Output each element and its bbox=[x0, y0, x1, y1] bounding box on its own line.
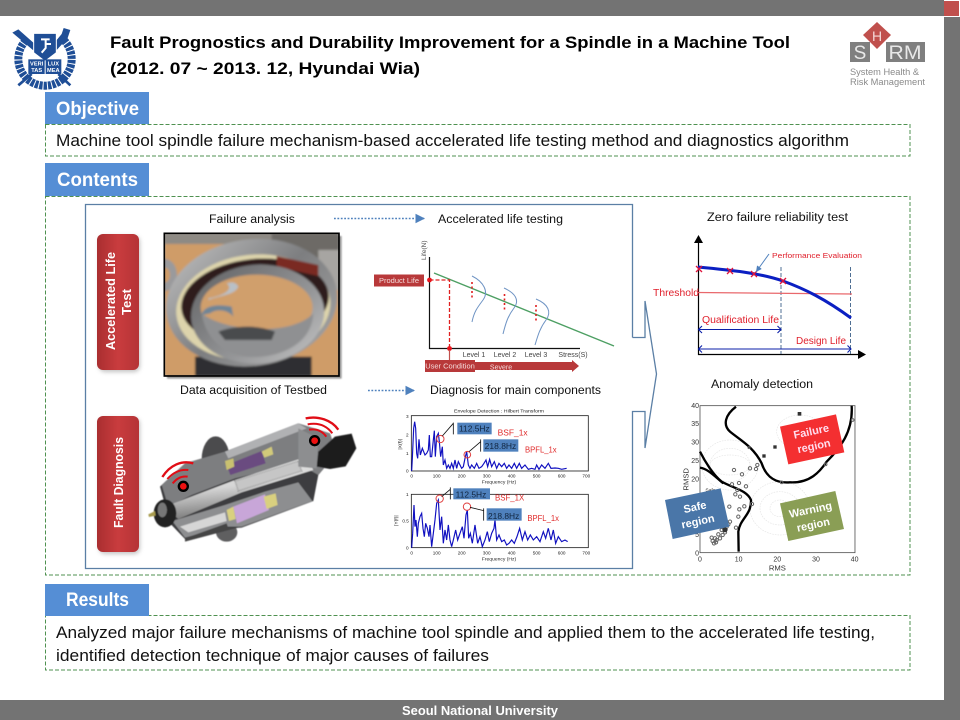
chart: accelerated life stress-life plot: Level 3 bbox=[525, 352, 547, 359]
icon: university emblem: TAS bbox=[31, 68, 42, 74]
chart: anomaly detection scatter map: RMS bbox=[769, 564, 786, 573]
illustration: spindle cutaway with sensors bbox=[148, 418, 356, 542]
chart: accelerated life stress-life plot: Level 2 bbox=[494, 352, 516, 359]
spectrum plot: upper: 500 bbox=[533, 473, 541, 478]
chart: anomaly detection scatter map: Region bbox=[783, 436, 799, 442]
chart: envelope spectra with fault frequencies: Envelope Detection : Hilbert Transform bbox=[454, 408, 544, 413]
footer bar bbox=[0, 700, 960, 720]
chart: zero failure reliability curve bbox=[653, 235, 866, 359]
label pill: accelerated life test bbox=[97, 234, 140, 372]
spectrum plot: lower: 1 bbox=[406, 492, 409, 497]
panel: results: identified detection technique of major causes of failures bbox=[56, 646, 489, 665]
heading: accelerated life testing: Accelerated life testing bbox=[438, 214, 563, 226]
chart: anomaly detection scatter map: 10 bbox=[691, 514, 699, 521]
chart: anomaly detection scatter map: Safe bbox=[705, 488, 716, 494]
spectrum plot: lower bbox=[393, 487, 591, 563]
heading: failure analysis: Failure analysis bbox=[209, 214, 295, 226]
spectrum plot: upper: BSF_1x bbox=[498, 428, 528, 437]
panel: objective bbox=[45, 92, 910, 156]
spectrum plot: upper: 0 bbox=[406, 469, 409, 474]
chart: envelope spectra with fault frequencies bbox=[393, 408, 591, 563]
chart: anomaly detection scatter map: RMSD bbox=[682, 468, 691, 491]
spectrum plot: lower: 300 bbox=[483, 550, 491, 555]
spectrum plot: upper: 218.8Hz bbox=[485, 442, 516, 451]
arrow: testbed to diagnosis bbox=[368, 390, 415, 392]
chart: anomaly detection scatter map: Failure bbox=[783, 427, 798, 433]
spectrum plot: upper: 0 bbox=[410, 473, 413, 478]
spectrum plot: lower: 112.5Hz bbox=[456, 491, 486, 500]
chart: anomaly detection scatter map: 5 bbox=[695, 532, 699, 539]
region label: warning: Warning bbox=[788, 500, 833, 521]
spectrum plot: upper: 200 bbox=[458, 473, 466, 478]
icon: SHRM logo: S bbox=[854, 43, 866, 64]
chart: anomaly detection scatter map: 20 bbox=[691, 477, 699, 484]
arrow: failure analysis to accelerated life testing bbox=[334, 218, 425, 220]
heading: zero failure reliability test: Zero failure reliability test bbox=[707, 212, 849, 224]
icon: SHRM logo: System Health & bbox=[850, 67, 920, 78]
chart: accelerated life stress-life plot bbox=[374, 240, 614, 372]
spectrum plot: lower: 200 bbox=[458, 550, 466, 555]
spectrum plot: upper: 300 bbox=[483, 473, 491, 478]
icon: SHRM logo bbox=[850, 22, 925, 88]
chart: accelerated life stress-life plot: Product Life bbox=[379, 276, 419, 285]
label pill: fault diagnosis: Fault Diagnosis bbox=[111, 437, 126, 528]
icon: university emblem bbox=[12, 28, 72, 86]
spectrum plot: upper: 700 bbox=[582, 473, 591, 478]
chart: anomaly detection scatter map: 35 bbox=[691, 421, 699, 428]
panel: results: Results bbox=[66, 590, 129, 611]
heading: diagnosis for main components: Diagnosis for main components bbox=[430, 385, 601, 397]
spectrum plot: upper: 3 bbox=[406, 414, 409, 419]
chart: anomaly detection scatter map bbox=[665, 403, 859, 573]
spectrum plot: upper: 112.5Hz bbox=[459, 425, 490, 434]
spectrum plot: lower: BSF_1X bbox=[495, 494, 525, 503]
spectrum plot: lower: 0 bbox=[410, 550, 413, 555]
spectrum plot: lower: 0.5 bbox=[402, 519, 409, 524]
icon: university emblem: MEA bbox=[47, 68, 60, 74]
chart: anomaly detection scatter map: 0 bbox=[695, 550, 699, 557]
spectrum plot: upper: Frequency (Hz) bbox=[482, 480, 516, 486]
spectrum plot: lower: |Y(f)| bbox=[393, 515, 399, 526]
spectrum plot: upper: BPFL_1x bbox=[525, 446, 557, 455]
region label: safe: region bbox=[680, 513, 716, 531]
spectrum plot: upper bbox=[397, 414, 591, 486]
spectrum plot: upper: 2 bbox=[406, 433, 409, 438]
chart: anomaly detection scatter map: 30 bbox=[691, 440, 699, 447]
region label: safe: Safe bbox=[682, 499, 708, 516]
spectrum plot: lower: Frequency (Hz) bbox=[482, 557, 516, 563]
chart: zero failure reliability curve: Performance Evaluation bbox=[772, 251, 862, 260]
icon: SHRM logo: H bbox=[872, 28, 882, 44]
region label: failure: region bbox=[796, 437, 832, 456]
label pill: accelerated life test: Test bbox=[119, 288, 134, 315]
chart: zero failure reliability curve: Design Life bbox=[796, 336, 846, 347]
chart: anomaly detection scatter map: 40 bbox=[691, 403, 699, 410]
region label: warning: region bbox=[796, 516, 831, 535]
spectrum plot: upper: 600 bbox=[558, 473, 566, 478]
region label: failure bbox=[780, 414, 844, 464]
spectrum plot: lower: 0 bbox=[406, 545, 409, 550]
panel: results: Analyzed major failure mechanisms of machine tool spindle and applied them to the accelerated life testing, bbox=[56, 623, 875, 642]
label pill: fault diagnosis bbox=[97, 416, 140, 554]
chart: accelerated life stress-life plot: Stress(S) bbox=[558, 352, 588, 359]
chart: anomaly detection scatter map: 15 bbox=[691, 495, 699, 502]
chart: anomaly detection scatter map: 30 bbox=[812, 556, 820, 563]
chart: anomaly detection scatter map: 25 bbox=[691, 458, 699, 465]
inner process frame and chevron arrow bbox=[86, 204, 656, 568]
spectrum plot: lower: 500 bbox=[533, 550, 541, 555]
spectrum plot: upper: 100 bbox=[433, 473, 441, 478]
chart: anomaly detection scatter map: 20 bbox=[773, 556, 781, 563]
panel: objective: Machine tool spindle failure mechanism-based accelerated life testing method and diagnostics algorithm bbox=[56, 131, 849, 150]
spectrum plot: upper: 1 bbox=[406, 451, 409, 456]
spectrum plot: upper: |X(f)| bbox=[397, 439, 403, 450]
title bbox=[110, 33, 790, 78]
chart: accelerated life stress-life plot: User Condition bbox=[425, 362, 475, 370]
footer bar: Seoul National University bbox=[402, 703, 559, 718]
region label: warning bbox=[780, 491, 844, 541]
chart: anomaly detection scatter map: 40 bbox=[851, 556, 859, 563]
chart: anomaly detection scatter map: Region bbox=[705, 497, 721, 503]
panel: results bbox=[45, 584, 910, 670]
chart: accelerated life stress-life plot: Level 1 bbox=[463, 352, 485, 359]
icon: SHRM logo: RM bbox=[888, 43, 922, 64]
spectrum plot: lower: BPFL_1x bbox=[527, 514, 559, 523]
spectrum plot: lower: 400 bbox=[508, 550, 516, 555]
chart: anomaly detection scatter map: 10 bbox=[735, 556, 743, 563]
title: (2012. 07 ~ 2013. 12, Hyundai Wia) bbox=[110, 59, 420, 78]
spectrum plot: upper: 400 bbox=[508, 473, 516, 478]
panel: objective: Objective bbox=[56, 99, 139, 120]
icon: university emblem: LUX bbox=[48, 62, 59, 68]
heading: data acquisition of testbed: Data acquisition of Testbed bbox=[180, 385, 327, 397]
icon: university emblem: VERI bbox=[30, 62, 44, 68]
region label: safe bbox=[665, 488, 729, 539]
spectrum plot: lower: 600 bbox=[558, 550, 566, 555]
region label: failure: Failure bbox=[792, 422, 830, 442]
spectrum plot: lower: 100 bbox=[433, 550, 441, 555]
title: Fault Prognostics and Durability Improvement for a Spindle in a Machine Tool bbox=[110, 33, 790, 52]
panel: contents bbox=[45, 163, 910, 575]
chart: zero failure reliability curve: Threshold bbox=[653, 288, 699, 299]
chart: anomaly detection scatter map: 0 bbox=[698, 556, 702, 563]
chart: accelerated life stress-life plot: Severe bbox=[490, 364, 512, 372]
chart: zero failure reliability curve: Qualification Life bbox=[702, 315, 779, 326]
spectrum plot: lower: 218.8Hz bbox=[488, 512, 519, 521]
chart: accelerated life stress-life plot: Life(N) bbox=[421, 240, 428, 260]
heading: anomaly detection: Anomaly detection bbox=[711, 379, 813, 391]
spectrum plot: lower: 700 bbox=[582, 550, 591, 555]
icon: SHRM logo: Risk Management bbox=[850, 77, 925, 88]
label pill: accelerated life test: Accelerated Life bbox=[103, 252, 118, 350]
photo: failed bearing bbox=[153, 228, 346, 379]
panel: contents: Contents bbox=[57, 170, 138, 191]
